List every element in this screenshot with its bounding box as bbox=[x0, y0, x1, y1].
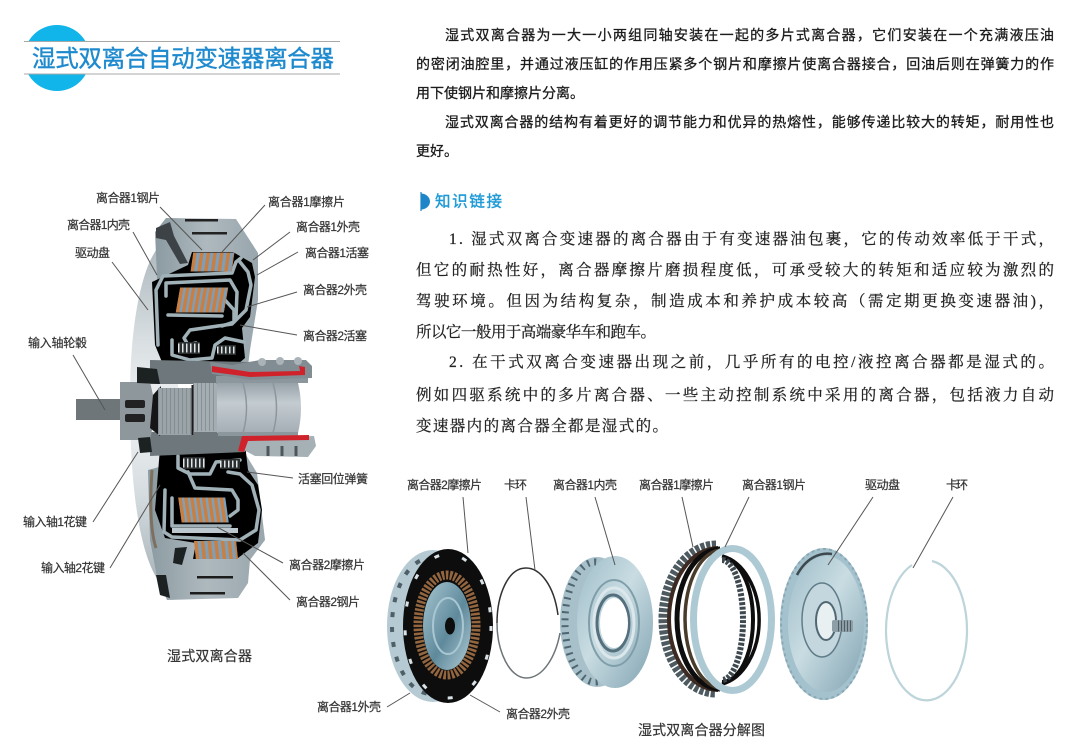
part: clutch plates stack bbox=[664, 546, 772, 692]
label: clutch 2 outer shell bbox=[470, 695, 570, 721]
title text: 湿式双离合自动变速器离合器 bbox=[32, 46, 334, 72]
label: input shaft 2 spline: 输入轴2花键 bbox=[41, 560, 105, 575]
caption: wet dual clutch: 湿式双离合器 bbox=[167, 648, 252, 664]
knowledge link text block: 驾驶环境。但因为结构复杂，制造成本和养护成本较高（需定期更换变速器油)， bbox=[416, 291, 1054, 310]
exploded view labels and leaders bbox=[317, 477, 968, 721]
label: input shaft hub bbox=[28, 335, 105, 410]
label: clutch 1 steel plate: 离合器1钢片 bbox=[96, 190, 160, 205]
label: clutch 2 piston bbox=[240, 325, 367, 343]
label: clutch 1 steel plate: 离合器1钢片 bbox=[742, 477, 806, 492]
drive disc bbox=[130, 240, 178, 580]
label: clutch 1 inner shell: 离合器1内壳 bbox=[67, 217, 130, 232]
label: clutch 1 inner shell bbox=[553, 477, 617, 565]
intro text block: 湿式双离合器为一大一小两组同轴安装在一起的多片式离合器，它们安装在一个充满液压油 bbox=[445, 27, 1054, 43]
label: clutch 1 steel plate bbox=[96, 190, 202, 250]
knowledge link text block bbox=[416, 230, 1054, 435]
intro text block: 用下使钢片和摩擦片分离。 bbox=[416, 85, 584, 101]
title banner bbox=[24, 25, 340, 91]
friction plates clutch 2 bbox=[178, 288, 226, 312]
icon: half disc marker bbox=[421, 192, 430, 211]
label: drive disc: 驱动盘 bbox=[865, 477, 900, 492]
upper piston and red seal bbox=[210, 357, 312, 380]
back plates right side bbox=[722, 556, 759, 684]
knowledge link text block: 所以它一般用于高端豪华车和跑车。 bbox=[416, 322, 656, 341]
label: piston return spring: 活塞回位弹簧 bbox=[298, 471, 368, 486]
intro text block: 更好。 bbox=[416, 143, 458, 159]
label: clutch 1 piston bbox=[257, 245, 369, 275]
knowledge link text block: 变速器内的离合器全都是湿式的。 bbox=[416, 417, 668, 435]
label: clutch 1 piston: 离合器1活塞 bbox=[305, 245, 369, 260]
label: clutch 1 steel plate bbox=[725, 477, 806, 547]
label: clutch 2 friction plate: 离合器2摩擦片 bbox=[407, 477, 482, 492]
label: clutch 2 outer shell: 离合器2外壳 bbox=[506, 706, 570, 721]
label: clutch 2 friction plate bbox=[407, 477, 482, 553]
exploded view illustration bbox=[387, 546, 967, 703]
label: clutch 1 outer shell bbox=[317, 693, 410, 714]
knowledge link text block: 2. 在干式双离合变速器出现之前，几乎所有的电控/液控离合器都是湿式的。 bbox=[449, 353, 1054, 371]
label: clutch 2 steel plate: 离合器2钢片 bbox=[296, 594, 360, 609]
knowledge link text block: 但它的耐热性好，离合器摩擦片磨损程度低，可承受较大的转矩和适应较为激烈的 bbox=[416, 261, 1054, 279]
friction plates clutch 1 lower bbox=[195, 541, 237, 559]
splined drums bbox=[158, 376, 310, 436]
label: piston return spring bbox=[247, 471, 368, 486]
intro text block: 的密闭油腔里，并通过液压缸的作用压紧多个钢片和摩擦片使离合器接合，回油后则在弹簧力的作 bbox=[416, 56, 1054, 72]
label: clutch 2 outer shell bbox=[247, 282, 367, 307]
centre housing behind shaft bbox=[150, 360, 250, 456]
label: clutch 1 friction plate: 离合器1摩擦片 bbox=[639, 477, 714, 492]
label: snap ring: 卡环 bbox=[504, 478, 527, 492]
upper interior bbox=[152, 219, 255, 372]
part: drive disc bbox=[780, 548, 868, 700]
knowledge link heading: 知识链接 bbox=[435, 192, 502, 210]
label: clutch 1 outer shell: 离合器1外壳 bbox=[317, 699, 381, 714]
lower interior bbox=[151, 442, 262, 598]
label: input shaft hub: 输入轴轮毂 bbox=[28, 335, 87, 350]
input shaft and hub bbox=[76, 367, 161, 453]
label: snap ring right: 卡环 bbox=[946, 478, 968, 492]
cutaway labels and leaders bbox=[23, 190, 369, 609]
upper housing bbox=[155, 218, 258, 366]
part: outer clutch assembly bbox=[387, 549, 493, 703]
knowledge link text block: 例如四驱系统中的多片离合器、一些主动控制系统中采用的离合器，包括液力自动 bbox=[416, 386, 1054, 404]
cutaway illustration: wet dual clutch bbox=[76, 218, 316, 600]
return springs lower bbox=[183, 457, 205, 469]
label: input shaft 1 spline bbox=[23, 452, 138, 529]
label: drive disc bbox=[828, 477, 900, 565]
part: outer snap ring bbox=[886, 561, 967, 700]
label: input shaft 1 spline: 输入轴1花键 bbox=[23, 514, 87, 529]
label: clutch 2 piston: 离合器2活塞 bbox=[303, 328, 367, 343]
friction plates clutch 1 bbox=[192, 252, 233, 272]
label: drive disc: 驱动盘 bbox=[75, 245, 110, 260]
label: clutch 2 outer shell: 离合器2外壳 bbox=[303, 282, 367, 297]
label: snap ring right bbox=[913, 478, 968, 568]
label: clutch 1 outer shell bbox=[253, 219, 360, 260]
label: clutch 1 friction plate: 离合器1摩擦片 bbox=[268, 194, 345, 209]
friction plates clutch 2 lower bbox=[180, 498, 227, 522]
back plates left side bbox=[664, 546, 722, 692]
knowledge link text block: 1. 湿式双离合变速器的离合器由于有变速器油包裹，它的传动效率低于干式， bbox=[449, 230, 1054, 248]
label: input shaft 2 spline bbox=[41, 485, 160, 575]
label: clutch 2 steel plate bbox=[243, 553, 360, 609]
front ring bbox=[694, 548, 772, 690]
label: clutch 1 inner shell: 离合器1内壳 bbox=[553, 477, 617, 492]
label: snap ring bbox=[504, 478, 535, 570]
part: clutch 1 inner shell bbox=[560, 556, 653, 688]
label: clutch 1 inner shell bbox=[67, 217, 157, 275]
label: clutch 2 friction plate: 离合器2摩擦片 bbox=[289, 557, 365, 572]
intro text block: 湿式双离合器的结构有着更好的调节能力和优异的热熔性，能够传递比较大的转矩，耐用性也 bbox=[445, 114, 1054, 130]
label: drive disc bbox=[75, 245, 148, 310]
lower piston and red seal bbox=[238, 435, 316, 457]
caption: exploded view: 湿式双离合器分解图 bbox=[638, 722, 765, 738]
label: clutch 1 outer shell: 离合器1外壳 bbox=[296, 219, 360, 234]
label: clutch 2 friction plate bbox=[217, 527, 365, 572]
part: snap ring bbox=[497, 568, 560, 678]
label: clutch 1 friction plate bbox=[222, 194, 345, 252]
intro text block bbox=[416, 27, 1054, 159]
lower housing bbox=[148, 445, 265, 600]
return springs bbox=[178, 342, 200, 354]
label: clutch 1 friction plate bbox=[639, 477, 714, 547]
